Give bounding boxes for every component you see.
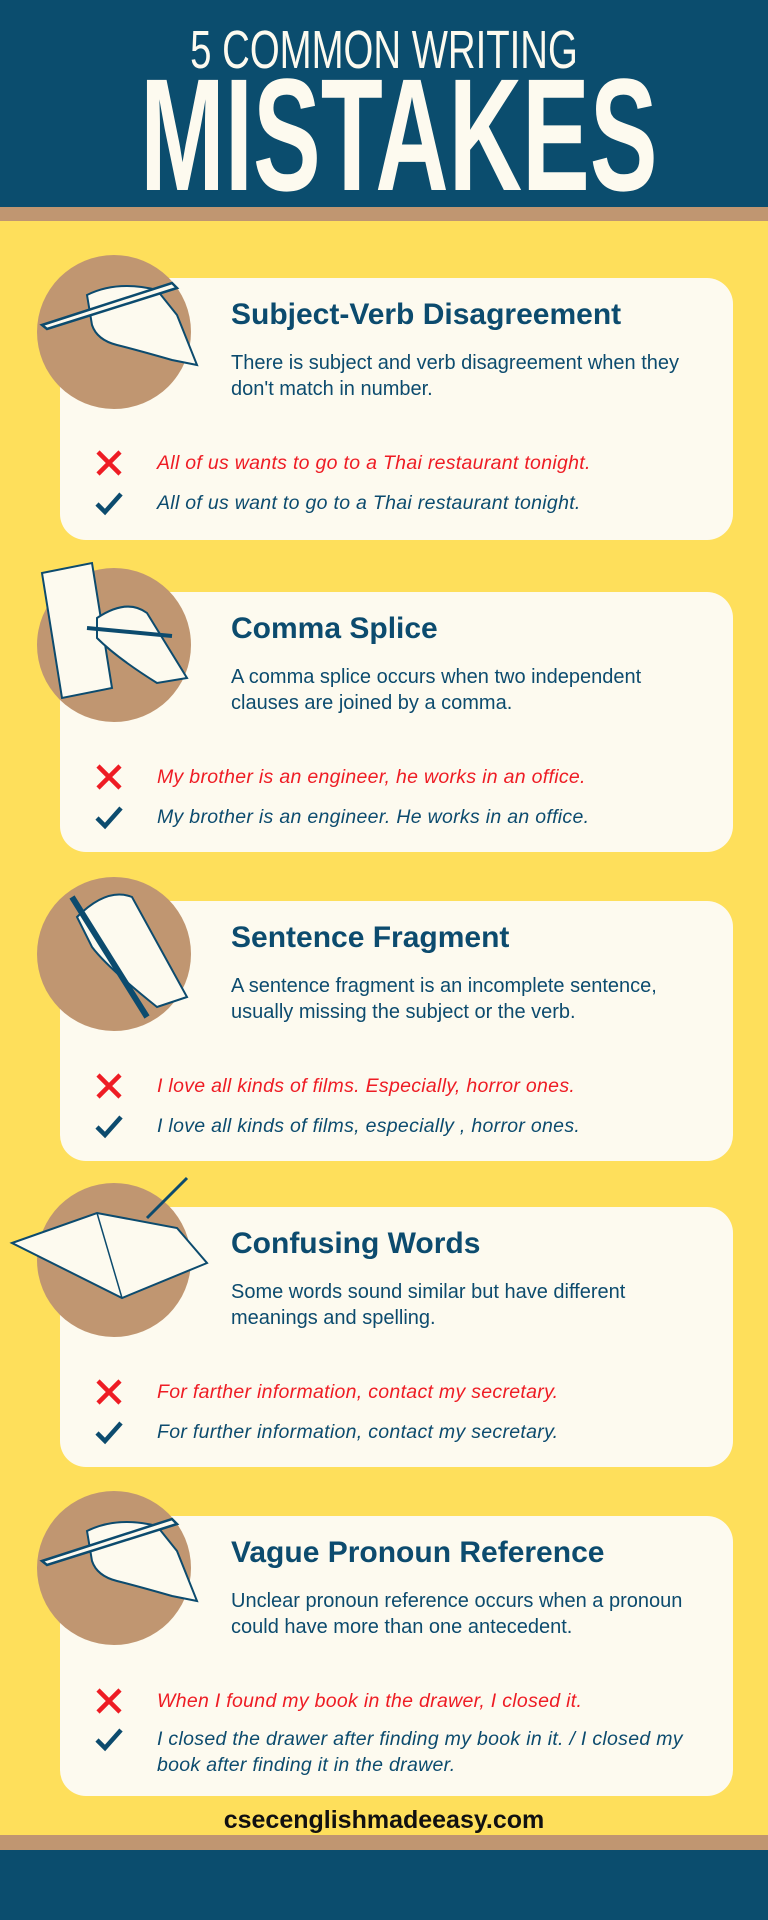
card 4: For further information, contact my secretary. xyxy=(157,1421,558,1443)
icon: hand 1 xyxy=(37,255,191,409)
card 5 xyxy=(60,1516,733,1796)
card 2: My brother is an engineer. He works in an office. xyxy=(157,806,589,828)
card 5: When I found my book in the drawer, I closed it. xyxy=(157,1690,582,1712)
footer band xyxy=(0,1850,768,1920)
card 3: I love all kinds of films. Especially, horror ones. xyxy=(157,1075,575,1097)
card 4: Some words sound similar but have different meanings and spelling. xyxy=(231,1281,625,1329)
card 5: I closed the drawer after finding my book in it. / I closed my book after finding it in the drawer. xyxy=(157,1728,683,1776)
card 5: Unclear pronoun reference occurs when a pronoun could have more than one antecedent. xyxy=(231,1590,682,1638)
website footer text: csecenglishmadeeasy.com xyxy=(224,1806,544,1834)
card 2: A comma splice occurs when two independent clauses are joined by a comma. xyxy=(231,666,641,714)
header band xyxy=(0,0,768,207)
icon: hand 5 xyxy=(37,1491,191,1645)
title line 1: 5 COMMON WRITING xyxy=(190,20,578,80)
icon: hand 2 xyxy=(37,568,191,722)
description: There is subject and verb disagreement when they don't match in number. xyxy=(231,352,679,400)
card 2: My brother is an engineer, he works in an office. xyxy=(157,766,586,788)
correct example: All of us want to go to a Thai restaurant tonight. xyxy=(157,492,581,514)
card 1 xyxy=(60,278,733,540)
card 3: Sentence Fragment xyxy=(231,921,509,954)
card 5: Vague Pronoun Reference xyxy=(231,1536,604,1569)
card 3: I love all kinds of films, especially , horror ones. xyxy=(157,1115,580,1137)
card 4: For farther information, contact my secretary. xyxy=(157,1381,558,1403)
card 2: Comma Splice xyxy=(231,612,438,645)
icon: hand 3 xyxy=(37,877,191,1031)
heading: Subject-Verb Disagreement xyxy=(231,298,621,331)
card 3 xyxy=(60,901,733,1161)
card 4: Confusing Words xyxy=(231,1227,480,1260)
title line 2: MISTAKES xyxy=(140,45,658,224)
card 3: A sentence fragment is an incomplete sentence, usually missing the subject or the verb. xyxy=(231,975,657,1023)
wrong example: All of us wants to go to a Thai restaurant tonight. xyxy=(157,452,591,474)
icon: hand 4 (book) xyxy=(37,1183,191,1337)
card 2 xyxy=(60,592,733,852)
card 4 xyxy=(60,1207,733,1467)
